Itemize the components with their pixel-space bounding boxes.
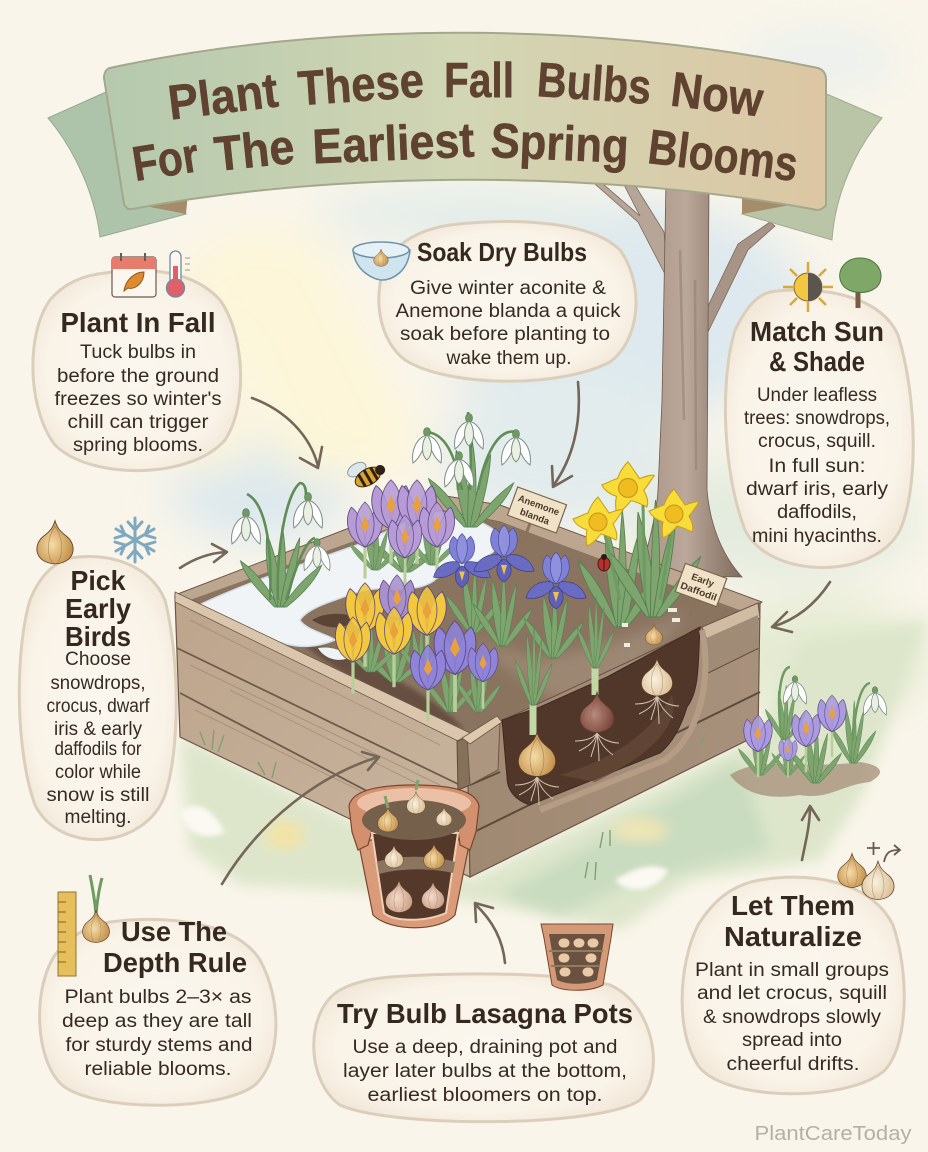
body text: melting. [64,807,132,828]
title line 1: Bulbs [535,53,653,115]
body text: & snowdrops slowly [703,1007,882,1028]
body text: dwarf iris, early [746,479,889,500]
icon: bulb with shoot [83,875,109,943]
body text: cheerful drifts. [726,1054,860,1075]
heading: Let Them [731,890,855,921]
cutaway bulbs and shoots [515,596,680,805]
heading: Early [65,593,131,624]
body text [396,278,621,369]
panel: pick early birds [19,518,176,840]
snow [197,512,501,646]
icon: bulb [37,521,73,564]
icon: half sun [783,262,833,312]
body text [62,987,252,1080]
yellow crocus cluster [335,575,446,694]
icon: thermometer [166,251,190,297]
right wood face [467,603,760,877]
body text: Under leafless [757,385,877,406]
body text: earliest bloomers on top. [368,1085,602,1106]
title line 1: Plant [165,64,281,131]
body text: wake them up. [445,348,572,369]
body text: freezes so winter's [54,389,222,410]
icon: snowflake [115,518,155,562]
icon: small layered pot [541,924,613,990]
ladybug [598,554,610,571]
violet crocus front [410,621,501,722]
body text: spring blooms. [73,435,203,456]
dwarf iris [434,525,586,658]
heading: Soak Dry Bulbs [417,237,587,267]
icon: bowl of water [353,242,410,280]
title line 2: Earliest [311,114,475,175]
arrow: sun to bed [772,582,830,632]
body text: daffodils, [777,502,857,523]
body text: trees: snowdrops, [744,408,890,429]
heading: Use The [121,916,227,947]
heading [750,316,884,377]
body text: layer later bulbs at the bottom, [343,1061,627,1082]
heading: Plant In Fall [60,307,216,338]
body text: crocus, dwarf [46,696,150,717]
heading: & Shade [769,346,865,377]
body text: chill can trigger [68,412,209,433]
title line 2: The [212,120,297,182]
sign: Early Daffodil: Early [690,572,716,590]
arrow: lasagna to pot [475,903,505,963]
body text: Use a deep, draining pot and [352,1037,618,1058]
snowdrops back centre [413,412,530,527]
title line 2: For [129,128,202,192]
arrow: naturalize to crocus [802,806,819,860]
body text: Choose [65,649,131,670]
body text: Anemone blanda a quick [396,301,621,322]
panel: match sun and shade [725,258,913,568]
heading: Depth Rule [103,947,247,978]
body text: Tuck bulbs in [80,342,196,363]
snowdrops left [232,483,330,607]
icon: multiplying bulbs [838,842,900,900]
sign: Anemone blanda [500,487,567,555]
terracotta pot [349,780,479,928]
brand watermark: PlantCareToday [754,1123,912,1145]
icon: calendar [112,253,156,297]
sign: Early Daffodil [669,563,727,624]
body text: spread into [742,1030,842,1051]
body text: and let crocus, squill [697,983,887,1004]
cutaway soil [502,627,700,805]
title banner [48,33,882,240]
body text: Plant in small groups [695,960,889,981]
ground [180,620,928,930]
naturalized crocus patch [730,667,887,797]
heading: Naturalize [724,921,862,952]
body text: mini hyacinths. [752,526,882,547]
panel: soak dry bulbs [353,222,636,381]
body text [695,960,889,1075]
grass tufts [200,730,705,880]
title line 2: Spring [490,114,630,174]
daffodils [573,462,700,627]
title line 2 [129,114,801,192]
body text: deep as they are tall [62,1011,252,1032]
heading [103,916,247,978]
body text: reliable blooms. [84,1059,232,1080]
sign: Anemone blanda: Anemone [516,493,561,518]
arrow: early birds to snowdrops [180,544,227,568]
heading: Birds [65,621,131,652]
heading [724,890,862,952]
panel: use the depth rule [40,875,276,1105]
title line 1: Now [668,63,767,128]
arrow: soak to sign [552,382,579,487]
raised garden bed [175,495,762,880]
title line 1: Fall [444,54,514,108]
body text [54,342,222,456]
title line 1 [165,53,767,131]
body text [744,385,890,547]
title line 2: Blooms [645,120,801,192]
panel: plant in fall [33,251,241,471]
body text: iris & early [54,719,142,740]
body text: crocus, squill. [758,431,876,452]
body text [46,649,150,828]
left wood face [175,597,470,877]
body text: soak before planting to [400,324,610,345]
body text: color while [55,762,141,783]
arrow: plant in fall to bed [252,398,322,468]
body text: Give winter aconite & [410,278,606,299]
body text [343,1037,627,1106]
body text: for sturdy stems and [66,1035,252,1056]
panel: let them naturalize [682,842,904,1094]
soil surface [190,510,745,735]
bee [345,452,388,492]
heading [65,565,131,652]
body text: snowdrops, [50,673,146,694]
body text: before the ground [57,366,219,387]
icon: tree [840,258,881,308]
heading: Match Sun [750,316,884,347]
panel: try bulb lasagna pots [314,924,653,1122]
sign: Early Daffodil: Daffodil [679,580,718,604]
arrow: depth rule to bed [222,752,379,884]
body text: daffodils for [54,739,142,760]
body text: snow is still [46,785,150,806]
heading: Try Bulb Lasagna Pots [337,998,633,1029]
title line 1: These [296,54,426,116]
heading: Pick [70,565,126,596]
purple crocus cluster [347,480,459,588]
back rim [175,495,762,615]
icon: ruler [58,892,76,976]
body text: Plant bulbs 2–3× as [64,987,252,1008]
sign: Anemone blanda: blanda [518,507,551,528]
body text: In full sun: [768,456,866,477]
tree [587,177,775,577]
